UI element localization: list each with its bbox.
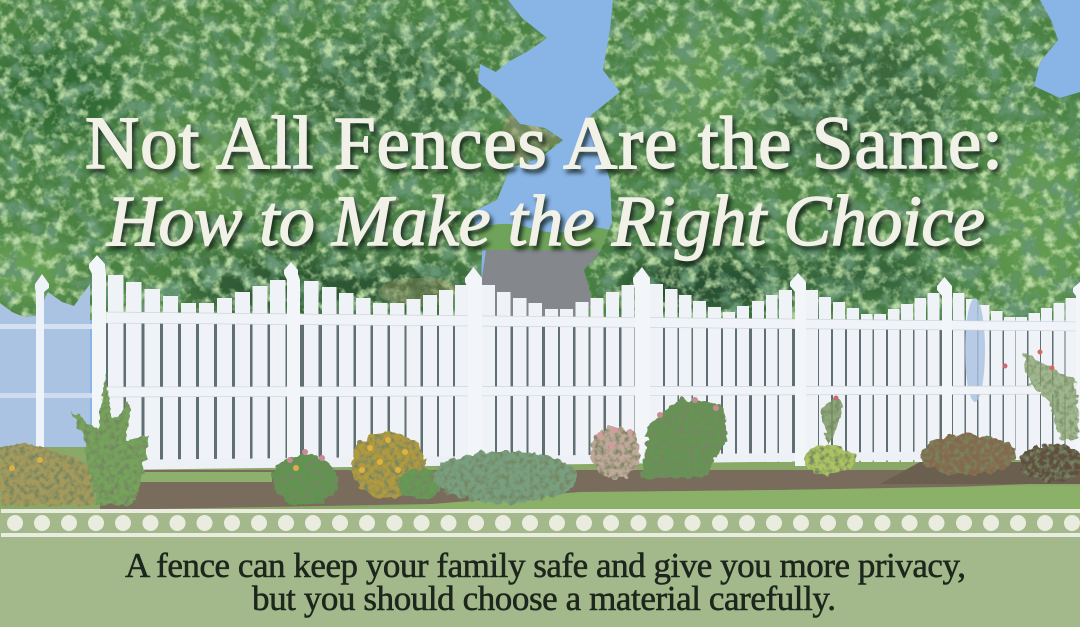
fence backing gaps: [106, 312, 1080, 468]
side fence, in shade: [0, 274, 92, 447]
plant: black-eyed susans: [351, 432, 425, 498]
bottom rail: [106, 450, 1080, 470]
plant: dark brown shrub: [1020, 444, 1080, 482]
roof of house: [476, 250, 604, 320]
picket panel 2: [304, 281, 468, 464]
band bottom line: [1, 533, 1080, 537]
plant: small climbing sprig: [820, 395, 842, 445]
plant: ornamental grass: [72, 375, 150, 505]
title: [85, 102, 1003, 261]
plant: yellow-green shrub: [804, 445, 856, 475]
picket panel 5: [806, 290, 940, 462]
band top line: [1, 509, 1080, 513]
plant: brown shrub: [920, 435, 1016, 475]
row of dots: [7, 515, 1080, 531]
top rail: [106, 312, 1080, 331]
main fence: [89, 255, 1080, 470]
flower accents: [9, 350, 1054, 473]
picket panel 3: [482, 285, 634, 463]
shadow on fence: [965, 298, 985, 402]
subtitle text: [125, 546, 966, 618]
middle rail: [106, 386, 1080, 397]
picket panel 6: [953, 293, 1077, 460]
plant: pink coneflower: [590, 426, 640, 478]
title line 2: How to Make the Right Choice: [106, 181, 985, 261]
plant: flowering green mound: [272, 455, 338, 505]
plant: climbing vine on fence: [1022, 352, 1078, 440]
plants and garden beds: [0, 352, 1080, 505]
bottom green band: [0, 509, 1080, 627]
picket panel 4: [650, 284, 792, 462]
plant: leafy green: [398, 469, 442, 499]
plant: tall coneflower: [642, 398, 726, 478]
title line 1: Not All Fences Are the Same:: [85, 102, 1003, 185]
plant: golden bush far left: [0, 444, 94, 505]
picket panel 1: [108, 275, 286, 469]
trees: [0, 0, 1080, 320]
side fence post: [35, 274, 49, 447]
ground: mulch and lawn: [0, 440, 1080, 510]
fence posts: [89, 255, 1080, 466]
plant: grey-green mound: [433, 451, 577, 503]
distant treeline: [470, 224, 620, 252]
subtitle text: but you should choose a material carefully.: [252, 579, 836, 618]
subtitle text: A fence can keep your family safe and give you more privacy,: [125, 546, 966, 585]
